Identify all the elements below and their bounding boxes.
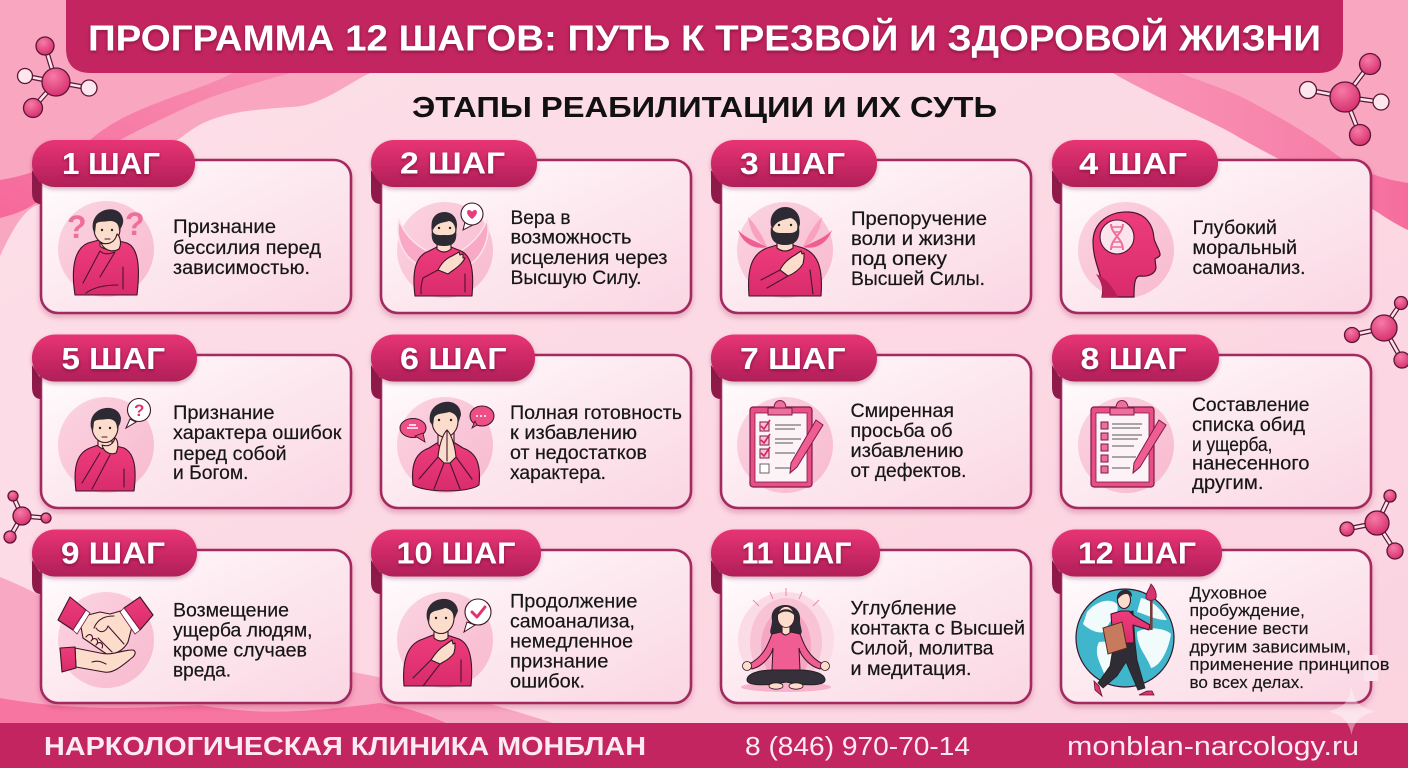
- step 8 text: списка обид: [1192, 415, 1305, 436]
- panel: step 3: [711, 140, 1031, 313]
- panel: step 5: [32, 334, 351, 508]
- icon: head with DNA: [1078, 202, 1174, 298]
- icon: puzzled man: ?: [67, 209, 87, 245]
- step 7 text: просьба об: [850, 421, 953, 442]
- step 2 text: Высшую Силу.: [510, 268, 642, 289]
- step 12 text: применение принципов: [1190, 655, 1390, 674]
- step 2 text: [510, 208, 668, 289]
- step 11 text: Углубление: [850, 598, 956, 620]
- step 11 text: и медитация.: [850, 659, 972, 680]
- step 4 text: [1192, 218, 1306, 279]
- step 6 text: к избавлению: [510, 423, 637, 444]
- step 12 text: несение вести: [1190, 619, 1308, 638]
- panel: step 1: [32, 140, 351, 313]
- step 3 text: Высшей Силы.: [851, 269, 985, 290]
- step 1 text: бессилия перед: [173, 238, 321, 259]
- panel: step 2: [371, 140, 691, 313]
- icon: checklist and pen: [737, 397, 833, 493]
- step 9 text: Возмещение: [173, 600, 289, 622]
- icon: man with hand on heart and wings: [737, 202, 833, 298]
- step 10 text: Продолжение: [510, 592, 638, 612]
- step 4 label: 4 ШАГ: [1079, 147, 1187, 181]
- sparkle: [1328, 687, 1375, 735]
- step 6 text: характера.: [510, 463, 606, 484]
- step 12 text: пробуждение,: [1190, 601, 1305, 620]
- panel: step 7: [711, 334, 1031, 508]
- step 11 text: [850, 598, 1025, 680]
- icon: meditating woman: [738, 588, 834, 692]
- step 4 text: моральный: [1192, 238, 1297, 259]
- step 10 text: [510, 592, 638, 692]
- step 9 label: 9 ШАГ: [61, 536, 165, 570]
- step 5 text: [173, 403, 342, 484]
- step 3 text: [851, 209, 987, 290]
- step 6 text: [510, 403, 682, 484]
- step 11 text: Силой, молитва: [850, 638, 994, 660]
- phone: 8 (846) 970-70-14: [745, 733, 970, 761]
- step 10 text: немедленное: [510, 632, 633, 652]
- step 6 text: Полная готовность: [510, 403, 682, 424]
- icon: man with question bubble: ?: [134, 401, 144, 420]
- step 1 text: Признание: [173, 217, 276, 238]
- footer bar: [0, 723, 1408, 768]
- step 6 text: от недостатков: [510, 443, 647, 464]
- step 12 label: 12 ШАГ: [1078, 536, 1196, 570]
- clinic name: НАРКОЛОГИЧЕСКАЯ КЛИНИКА МОНБЛАН: [44, 733, 646, 761]
- panel: step 10: [371, 530, 691, 703]
- step 8 text: другим.: [1192, 473, 1264, 494]
- step 3 text: под опеку: [851, 249, 948, 270]
- icon: man with wings and heart: [397, 202, 493, 298]
- icon: puzzled man: [58, 201, 154, 297]
- step 5 text: Признание: [173, 403, 274, 424]
- icon: handshake: [58, 592, 154, 688]
- step 2 text: исцеления через: [510, 248, 668, 269]
- step 2 text: возможность: [510, 228, 632, 248]
- step 2 label: 2 ШАГ: [400, 146, 505, 180]
- step 5 label: 5 ШАГ: [62, 342, 165, 376]
- molecule right lower: [1340, 490, 1403, 559]
- panel: step 8: [1052, 334, 1371, 508]
- step 12 text: во всех делах.: [1190, 673, 1304, 692]
- step 5 text: и Богом.: [173, 463, 248, 484]
- step 12 text: другим зависимым,: [1190, 638, 1351, 656]
- step 1 text: [173, 217, 321, 279]
- step 12 text: Духовное: [1190, 584, 1267, 602]
- step 3 label: 3 ШАГ: [740, 147, 845, 181]
- panel: step 4: [1052, 140, 1371, 313]
- step 11 label: 11 ШАГ: [742, 536, 852, 570]
- step 8 text: [1192, 395, 1310, 494]
- molecule left lower: [4, 491, 51, 543]
- icon: puzzled man: ?: [125, 206, 145, 242]
- panel: step 9: [32, 530, 351, 703]
- step 8 text: нанесенного: [1192, 454, 1310, 474]
- step 2 text: Вера в: [510, 208, 570, 229]
- panel: step 6: [371, 334, 691, 508]
- panel: step 11: [711, 530, 1031, 703]
- step 3 text: Препоручение: [851, 209, 987, 230]
- step 10 text: самоанализа,: [510, 612, 635, 632]
- step 8 label: 8 ШАГ: [1080, 342, 1186, 376]
- website: monblan-narcology.ru: [1067, 733, 1359, 761]
- step 4 text: Глубокий: [1192, 218, 1277, 239]
- step 5 text: перед собой: [173, 444, 286, 465]
- step 9 text: вреда.: [173, 660, 231, 682]
- step 7 label: 7 ШАГ: [740, 342, 846, 376]
- molecule top right: [1300, 54, 1389, 146]
- step 10 label: 10 ШАГ: [396, 536, 516, 570]
- step 10 text: признание: [510, 652, 608, 672]
- panel: step 12: [1052, 530, 1390, 703]
- icon: globe and walking man with torch: [1076, 584, 1174, 696]
- step 6 label: 6 ШАГ: [400, 342, 506, 376]
- molecule top left: [18, 37, 97, 118]
- step 7 text: от дефектов.: [850, 461, 966, 482]
- step 7 text: [850, 401, 966, 482]
- step 7 text: Смиренная: [850, 401, 954, 422]
- step 11 text: контакта с Высшей: [850, 618, 1025, 640]
- icon: list and pen: [1078, 397, 1174, 493]
- step 4 text: самоанализ.: [1192, 258, 1306, 279]
- title: ПРОГРАММА 12 ШАГОВ: ПУТЬ К ТРЕЗВОЙ И ЗДОРОВОЙ ЖИЗНИ: [88, 16, 1321, 58]
- title banner: [66, 0, 1343, 73]
- step 3 text: воли и жизни: [851, 229, 976, 250]
- step 8 text: Составление: [1192, 395, 1310, 416]
- step 9 text: ущерба людям,: [173, 620, 312, 642]
- step 1 label: 1 ШАГ: [62, 147, 160, 181]
- step 9 text: [173, 600, 312, 682]
- icon: man with checkmark bubble: [397, 592, 493, 688]
- step 12 text: [1190, 584, 1390, 692]
- icon: praying man: [397, 397, 494, 493]
- step 5 text: характера ошибок: [173, 423, 342, 444]
- step 9 text: кроме случаев: [173, 640, 307, 662]
- step 8 text: и ущерба,: [1192, 435, 1272, 456]
- icon: man with question bubble: [58, 397, 154, 493]
- subtitle: ЭТАПЫ РЕАБИЛИТАЦИИ И ИХ СУТЬ: [412, 92, 997, 124]
- molecule right middle: [1344, 296, 1408, 368]
- step 10 text: ошибок.: [510, 672, 585, 692]
- step 1 text: зависимостью.: [173, 258, 310, 279]
- step 7 text: избавлению: [850, 441, 964, 462]
